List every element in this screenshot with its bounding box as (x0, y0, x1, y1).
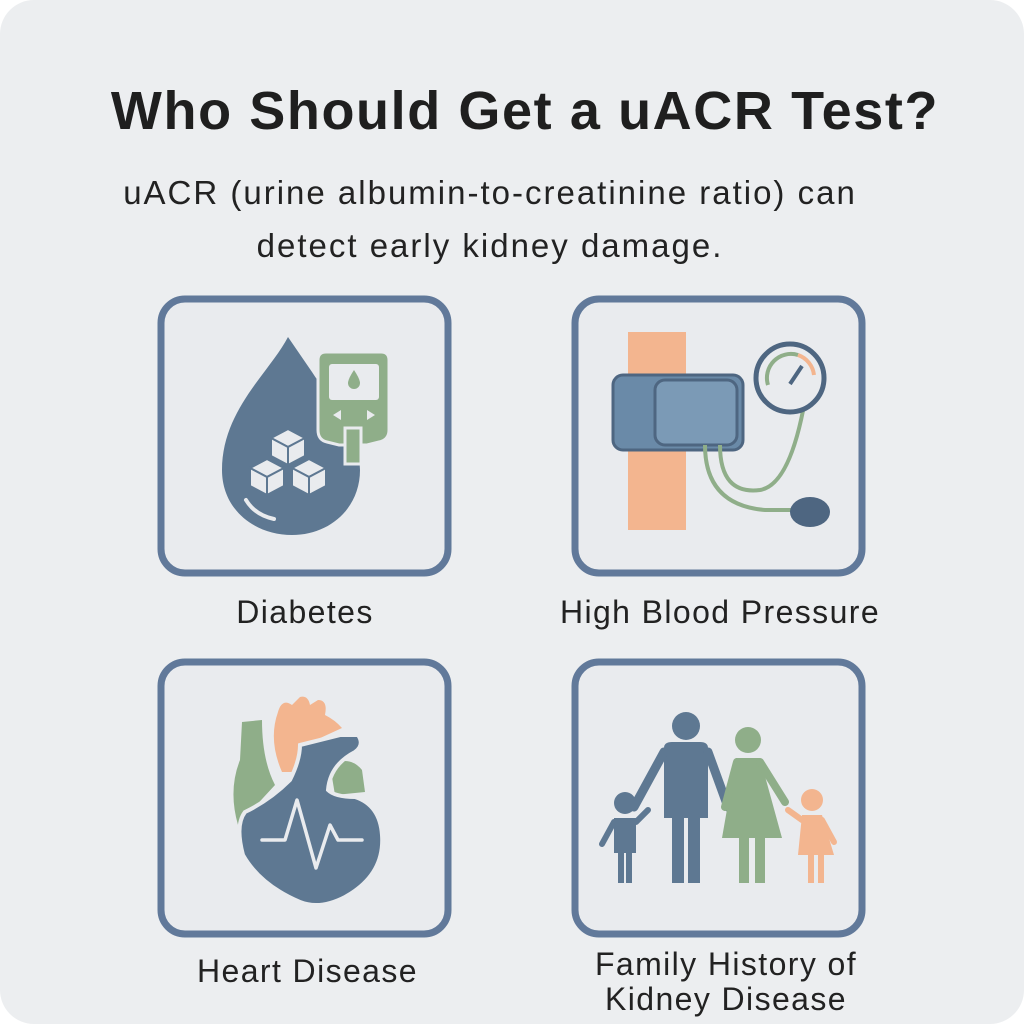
panel: diabetes (161, 299, 862, 934)
label: family history: Family History of (595, 946, 857, 982)
subtitle: uACR (urine albumin-to-creatinine ratio) can (123, 174, 857, 211)
label: high blood pressure: High Blood Pressure (560, 594, 880, 630)
icon: blood pressure cuff (613, 332, 830, 530)
panel: heart disease (161, 662, 448, 934)
icon: glucose meter (318, 352, 389, 464)
label: family history (595, 946, 857, 1017)
panel: high blood pressure (575, 299, 862, 573)
label: family history: Kidney Disease (605, 981, 847, 1017)
title: Who Should Get a uACR Test? (111, 81, 939, 141)
label: heart disease: Heart Disease (197, 953, 418, 989)
subtitle (123, 174, 857, 264)
panel: family history (575, 662, 862, 934)
icon: family (602, 712, 834, 883)
label: diabetes: Diabetes (236, 594, 374, 630)
icon: blood drop with sugar cubes (222, 337, 389, 535)
icon: heart (233, 697, 382, 905)
subtitle: detect early kidney damage. (257, 227, 723, 264)
